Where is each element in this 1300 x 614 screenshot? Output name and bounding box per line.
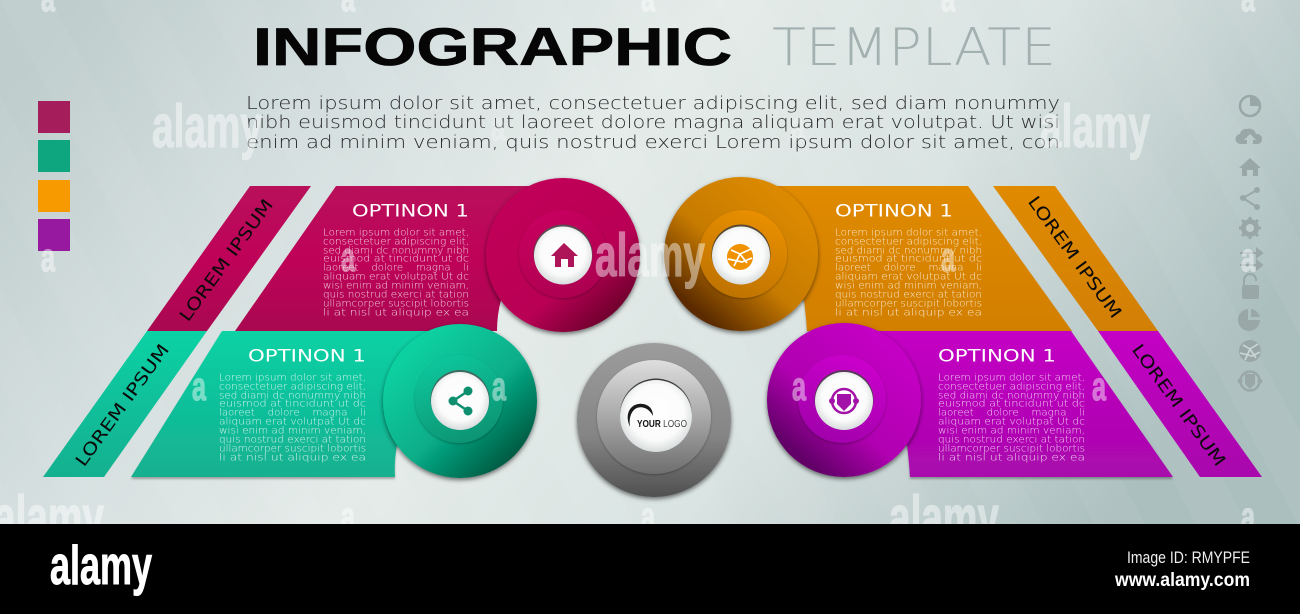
colour swatches legend <box>38 101 70 251</box>
teal body text: ullamcorper suscipit lobortis <box>219 444 366 454</box>
icon: pie <box>1238 309 1260 331</box>
orange strip with label <box>993 186 1158 331</box>
watermarks: alamy <box>152 93 262 160</box>
title: TEMPLATE <box>772 18 1056 78</box>
teal body text: wisi enim ad minim veniam, <box>219 426 366 436</box>
icon: globe <box>1239 340 1261 362</box>
orange body text: ullamcorper suscipit lobortis <box>835 298 982 310</box>
watermarks: a <box>792 365 806 409</box>
icon: share <box>1240 187 1260 210</box>
crimson body text: Lorem ipsum dolor sit amet, <box>323 228 469 238</box>
teal body text: euismod at tincidunt ut dc <box>219 398 366 410</box>
teal body text <box>219 372 366 464</box>
panel: teal option <box>43 324 537 478</box>
icon: pie ring <box>1240 96 1260 116</box>
watermarks: a <box>641 495 655 539</box>
orange body text: consectetuer adipiscing elit, <box>835 236 982 248</box>
teal body text: Lorem ipsum dolor sit amet, <box>219 372 366 384</box>
crimson body text <box>323 228 469 318</box>
crimson circle with home icon <box>486 178 640 332</box>
footer url: www.alamy.com <box>1114 570 1250 591</box>
orange body text: Lorem ipsum dolor sit amet, <box>835 228 982 238</box>
watermarks: a <box>1092 365 1106 409</box>
footer bar <box>0 524 1300 614</box>
watermarks: a <box>192 365 206 409</box>
watermarks: a <box>941 236 955 280</box>
purple body text: sed diami dc nonummy nibh <box>938 390 1085 402</box>
crimson body text: euismod at tincidunt ut dc <box>323 254 469 264</box>
teal body text: quis nostrud exerci at tation <box>219 434 366 446</box>
orange circle with globe icon <box>664 177 818 331</box>
orange body text: aliquam erat volutpat Ut dc <box>835 272 982 282</box>
orange body text: euismod at tincidunt ut dc <box>835 254 982 264</box>
teal strip with label <box>43 331 207 477</box>
orange body text: laoreet dolore magna li <box>835 262 982 274</box>
purple body text: quis nostrud exerci at tation <box>938 434 1085 446</box>
logo swoosh <box>628 404 653 427</box>
orange heading: OPTINON 1 <box>835 202 953 222</box>
intro text block <box>246 93 1060 153</box>
teal body text: aliquam erat volutpat Ut dc <box>219 416 366 428</box>
panel: purple option <box>767 323 1262 477</box>
crimson body text: ullamcorper suscipit lobortis <box>323 298 469 310</box>
purple body text: Lorem ipsum dolor sit amet, <box>938 372 1085 384</box>
teal circle with share icon <box>383 324 537 478</box>
crimson panel body <box>235 186 545 331</box>
panel: crimson option <box>147 178 640 332</box>
purple circle with support icon <box>767 323 921 477</box>
orange body text <box>835 228 982 318</box>
icon: gear <box>1239 217 1261 239</box>
footer alamy logo: alamy <box>50 534 152 596</box>
purple strip with label: LOREM IPSUM <box>1127 341 1229 471</box>
purple panel body <box>860 331 1173 477</box>
purple body text: wisi enim ad minim veniam, <box>938 426 1085 436</box>
purple body text <box>938 372 1085 464</box>
teal body text: sed diami dc nonummy nibh <box>219 390 366 402</box>
crimson heading: OPTINON 1 <box>352 202 469 222</box>
teal heading: OPTINON 1 <box>248 346 366 366</box>
crimson body text: consectetuer adipiscing elit, <box>323 236 469 248</box>
intro text block: enim ad minim veniam, quis nostrud exerci Lorem ipsum dolor sit amet, con <box>246 132 1060 153</box>
purple body text: euismod at tincidunt ut dc <box>938 398 1085 410</box>
teal body text: consectetuer adipiscing elit, <box>219 382 366 392</box>
orange body text: li at nisl ut aliquip ex ea <box>835 308 982 318</box>
purple heading: OPTINON 1 <box>938 346 1056 366</box>
crimson body text: li at nisl ut aliquip ex ea <box>323 308 469 318</box>
intro text block: Lorem ipsum dolor sit amet, consectetuer adipiscing elit, sed diam nonummy <box>246 93 1060 114</box>
teal panel body <box>131 331 450 477</box>
crimson strip with label <box>147 186 311 331</box>
crimson body text: laoreet dolore magna li <box>323 262 469 274</box>
logo text: YOUR LOGO <box>637 419 687 430</box>
purple strip with label <box>1098 331 1262 477</box>
intro text block: nibh euismod tincidunt ut laoreet dolore magna aliquam erat volutpat. Ut wisi <box>246 112 1060 133</box>
icon: arrows <box>1240 249 1262 269</box>
watermarks: alamy <box>595 222 705 289</box>
purple body text: li at nisl ut aliquip ex ea <box>938 452 1085 464</box>
icon: cloud <box>1235 129 1262 144</box>
title <box>253 18 1056 78</box>
orange body text: quis nostrud exerci at tation <box>835 290 982 300</box>
purple body text: ullamcorper suscipit lobortis <box>938 444 1085 454</box>
orange panel body <box>740 186 1072 331</box>
panel: orange option <box>664 177 1158 331</box>
watermarks: a <box>1241 236 1255 280</box>
crimson body text: wisi enim ad minim veniam, <box>323 280 469 292</box>
watermarks: alamy <box>1040 93 1150 160</box>
watermarks: a <box>491 105 505 149</box>
watermarks: a <box>341 495 355 539</box>
orange body text: wisi enim ad minim veniam, <box>835 280 982 292</box>
crimson strip with label: LOREM IPSUM <box>176 196 278 326</box>
crimson body text: quis nostrud exerci at tation <box>323 290 469 300</box>
footer image id: Image ID: RMYPFE <box>1127 548 1250 567</box>
purple body text: aliquam erat volutpat Ut dc <box>938 416 1085 428</box>
icon: home <box>1239 158 1261 176</box>
teal body text: laoreet dolore magna li <box>219 408 366 418</box>
orange body text: sed diami dc nonummy nibh <box>835 246 982 256</box>
watermarks: a <box>1241 495 1255 539</box>
watermarks: a <box>791 105 805 149</box>
centre logo circle <box>577 343 731 497</box>
icon: lock <box>1242 274 1259 299</box>
crimson body text: sed diami dc nonummy nibh <box>323 246 469 256</box>
title: INFOGRAPHIC <box>253 18 732 77</box>
purple body text: laoreet dolore magna li <box>938 408 1085 418</box>
watermarks: a <box>41 236 55 280</box>
watermarks: alamy <box>889 484 999 551</box>
icon: robot <box>1238 372 1262 390</box>
watermarks: a <box>341 236 355 280</box>
purple body text: consectetuer adipiscing elit, <box>938 382 1085 392</box>
teal strip with label: LOREM IPSUM <box>72 341 174 471</box>
orange strip with label: LOREM IPSUM <box>1023 193 1125 323</box>
icon column <box>1235 96 1262 390</box>
watermarks: a <box>492 365 506 409</box>
crimson body text: aliquam erat volutpat Ut dc <box>323 272 469 282</box>
teal body text: li at nisl ut aliquip ex ea <box>219 452 366 464</box>
